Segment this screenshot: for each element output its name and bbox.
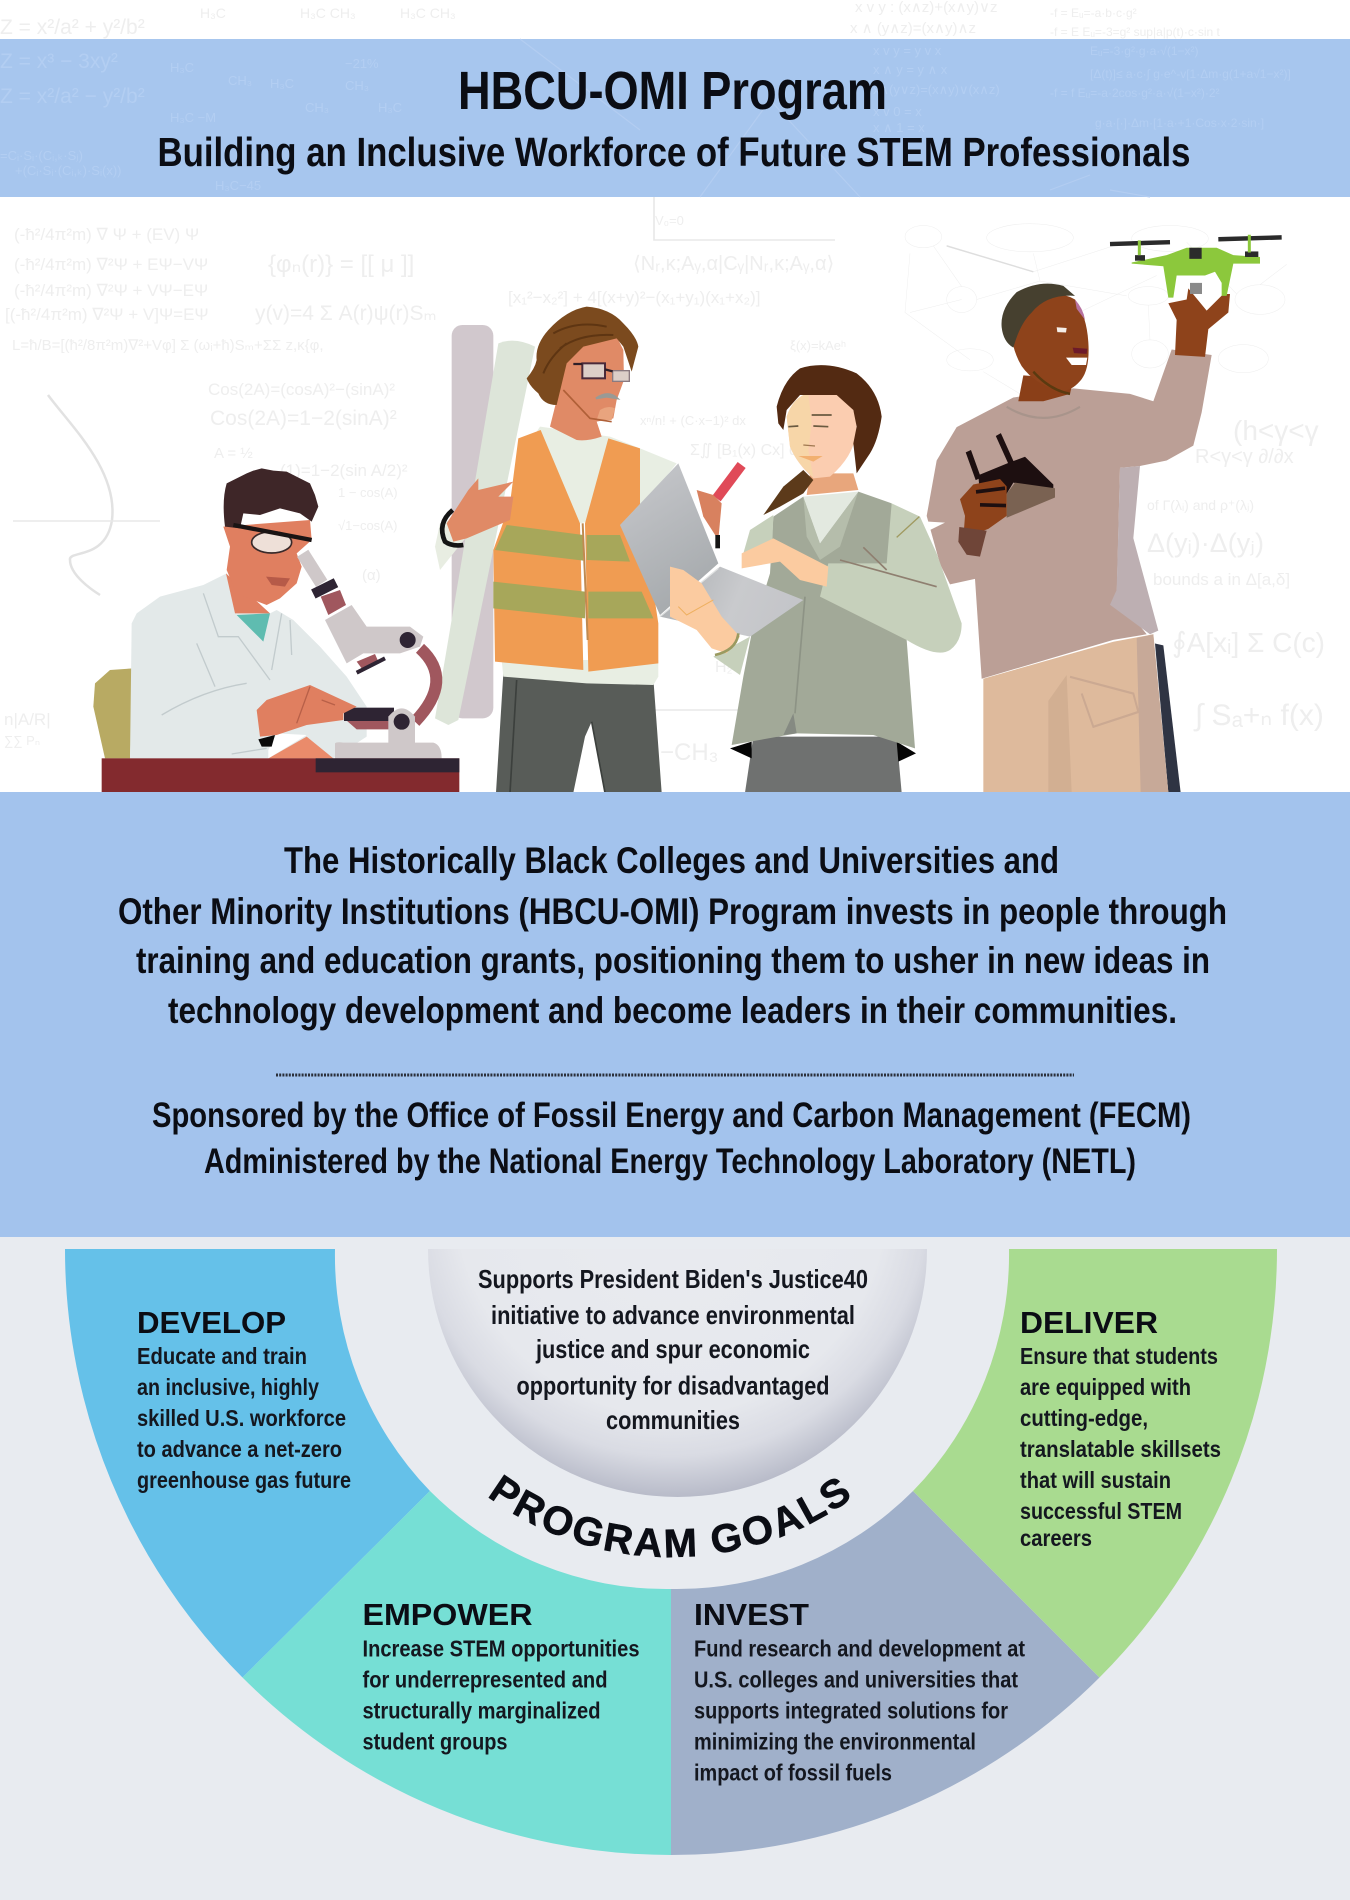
formula background: {φₙ(r)} = [[ μ ]] [268, 251, 414, 278]
invest text: U.S. colleges and universities that [694, 1666, 1018, 1692]
develop text: skilled U.S. workforce [137, 1405, 346, 1431]
formula background: V₀=0 [655, 213, 684, 228]
banner formula texture: CH₃ [345, 78, 369, 93]
formula background: y(v)=4 Σ A(r)ψ(r)Sₘ [255, 302, 437, 325]
formula background: ξ(x)=kAeʰ [790, 338, 846, 353]
formula background: x ∧ (y∧z)=(x∧y)∧z [850, 20, 976, 37]
formula background: Cos(2A)=1−2(sinA)² [210, 407, 397, 430]
formula background: H₃C [200, 5, 226, 21]
hand and knee [268, 737, 333, 758]
formula background: ⟨Nᵣ,κ;Aᵧ,α|Cᵧ|Nᵣ,κ;Aᵧ,α⟩ [633, 253, 834, 275]
network diagram sketch [905, 224, 1287, 394]
formula background: ∫ Sₐ+ₙ f(x) [1193, 699, 1324, 732]
description text [118, 840, 1227, 1031]
central justice40 callout [428, 1249, 927, 1497]
deliver text: cutting-edge, [1020, 1405, 1148, 1431]
invest text: minimizing the environmental [694, 1728, 976, 1754]
formula background: Δ(yᵢ)·Δ(yⱼ) [1147, 528, 1264, 558]
description text: The Historically Black Colleges and Universities and [284, 840, 1059, 881]
banner formula texture: x ∧ 1 = x [873, 120, 925, 135]
illustration: engineer in safety vest [435, 307, 742, 793]
develop text: to advance a net-zero [137, 1436, 342, 1462]
central justice40 callout: opportunity for disadvantaged [516, 1370, 830, 1400]
formula background: Z = x²/a² + y²/b² [0, 16, 145, 39]
banner formula texture: x∧(y∨z)=(x∧y)∨(x∧z) [873, 82, 1000, 97]
subtitle: Building an Inclusive Workforce of Future STEM Professionals [158, 129, 1190, 175]
description text: technology development and become leaders in their communities. [168, 990, 1177, 1031]
banner formula texture: g·a·[·]·Δm·[1·a·+1·Cos·x·2·sin·] [1095, 116, 1264, 130]
formula background: √1−cos(A) [338, 518, 398, 533]
deliver text: that will sustain [1020, 1467, 1171, 1493]
formula background: −CH₃ [660, 739, 718, 766]
formula background: A = ½ [214, 445, 253, 462]
formula background: H₃C CH₃ [400, 5, 456, 21]
formula background [0, 0, 1325, 766]
formula background: xⁿ/n! + (C·x−1)² dx [640, 413, 746, 428]
empower text: for underrepresented and [362, 1666, 608, 1692]
header banner [0, 39, 1350, 197]
banner formula texture [0, 39, 1291, 197]
banner formula texture: x ∧ y = y ∧ x [873, 62, 948, 77]
title: HBCU-OMI Program [458, 61, 887, 121]
formula background: -f = Eᵤ=-a·b·c·g² [1050, 6, 1137, 20]
empower text: structurally marginalized [362, 1698, 600, 1724]
tablet [620, 463, 803, 637]
illustration: woman with tablet [620, 365, 962, 793]
sponsor text: Administered by the National Energy Technology Laboratory (NETL) [204, 1142, 1136, 1181]
deliver heading: DELIVER [1020, 1305, 1158, 1340]
banner formula texture: H₃C [270, 76, 294, 91]
develop text: greenhouse gas future [137, 1467, 351, 1493]
develop text: Educate and train [137, 1343, 307, 1369]
empower text [362, 1636, 640, 1754]
formula background: Cos(2A)=(cosA)²−(sinA)² [208, 380, 395, 399]
formula background: -f = E Eᵤ=-3=g² sup|a|p(t)·c·sin t [1050, 25, 1221, 39]
controller [958, 435, 1055, 557]
formula background: [x₁²−x₂²] + 4[(x+y)²−(x₁+y₁)(x₁+x₂)] [508, 288, 760, 307]
banner formula texture: +(Cᵢ·Sᵢ·(Cᵢ,ₖ)·Sᵢ(x)) [15, 163, 122, 178]
banner formula texture: CH₃ [228, 73, 252, 88]
formula background: of Γ(λᵢ) and ρ⁺(λⱼ) [1147, 497, 1254, 513]
red pen and hand [717, 465, 742, 498]
formula background: (α) [362, 567, 381, 584]
illustration: lab scientist at microscope [93, 468, 459, 792]
panel: program description [0, 792, 1350, 1237]
deliver text: translatable skillsets [1020, 1436, 1221, 1462]
banner formula texture: =Cᵢ·Sᵢ·(Cᵢ,ₖ·Sⱼ) [0, 148, 83, 163]
chair [93, 668, 133, 758]
formula background: ∮A[xᵢ] Σ C(c) [1172, 627, 1325, 658]
formula background: H₂ [715, 659, 733, 676]
formula background: (-ħ²/4π²m) ∇ Ψ + (EV) Ψ [14, 225, 199, 244]
banner formula texture: H₃C [170, 60, 194, 75]
banner formula texture: H₃C −M [170, 110, 216, 125]
banner formula texture: Z = x²/a² − y²/b² [0, 85, 145, 108]
formula background: 1 − cos(A) [338, 485, 398, 500]
invest heading: INVEST [694, 1597, 809, 1632]
banner formula texture: H₃C [378, 100, 402, 115]
formula background: (-ħ²/4π²m) ∇²Ψ + VΨ−EΨ [14, 281, 208, 300]
empower heading: EMPOWER [362, 1597, 532, 1632]
formula background: (h<γ<γ [1233, 415, 1319, 446]
empower text: Increase STEM opportunities [362, 1636, 640, 1662]
deliver text: successful STEM [1020, 1498, 1182, 1524]
sine curve sketch [48, 395, 113, 595]
formula background: bounds a in Δ[a,δ] [1153, 570, 1290, 589]
invest text: supports integrated solutions for [694, 1698, 1008, 1724]
develop text: an inclusive, highly [137, 1374, 319, 1400]
central justice40 callout: communities [606, 1405, 740, 1435]
develop text [137, 1343, 351, 1493]
develop heading: DEVELOP [137, 1305, 286, 1340]
central justice40 callout: initiative to advance environmental [491, 1300, 855, 1330]
banner formula texture: Eᵤ=-3·g²·g·a·√(1−x²) [1090, 44, 1199, 58]
formula background: ∑∑ Pₙ [4, 733, 40, 748]
central justice40 callout: Supports President Biden's Justice40 [478, 1264, 868, 1294]
illustration: drone operator [927, 235, 1282, 793]
banner formula texture: Z = x³ − 3xy² [0, 50, 118, 73]
invest text: impact of fossil fuels [694, 1760, 892, 1786]
segment: empower [242, 1491, 671, 1855]
hands [742, 538, 828, 587]
formula background: (-ħ²/4π²m) ∇²Ψ + EΨ−VΨ [14, 255, 208, 274]
deliver text: are equipped with [1020, 1374, 1191, 1400]
segment: develop [65, 1249, 430, 1678]
invest text: Fund research and development at [694, 1636, 1025, 1662]
banner formula texture: -f = f Eᵤ=-a·2cos·g²·a·√(1−x²)·2² [1050, 86, 1220, 100]
formula background: n|A/R| [4, 710, 51, 729]
formula background: b [880, 712, 888, 728]
formula background: Σ∬ [B₁(x) Cx] dx dy [690, 442, 827, 459]
drone [1110, 235, 1282, 298]
hand left [447, 478, 513, 542]
segment: deliver [913, 1249, 1277, 1678]
deliver text: careers [1020, 1525, 1092, 1551]
banner formula texture: [Δ(t)]≤ a·c·∫ g·e^-v[1·Δm·g(1+a√1−x²)] [1090, 67, 1291, 81]
formula background: [(-ħ²/4π²m) ∇²Ψ + V]Ψ=EΨ [5, 305, 209, 324]
deliver text [1020, 1343, 1221, 1551]
invest text [694, 1636, 1025, 1786]
banner formula texture: x v y = y v x [873, 43, 942, 58]
microscope [303, 553, 442, 758]
lab coat [130, 573, 367, 758]
segment: invest [671, 1491, 1100, 1855]
deliver text: Ensure that students [1020, 1343, 1218, 1369]
desk [102, 758, 459, 792]
banner formula texture: CH₃ [305, 100, 329, 115]
empower text: student groups [362, 1728, 508, 1754]
formula background: (1)=1−2(sin A/2)² [280, 461, 408, 480]
formula background: R<γ<γ ∂/∂x [1195, 446, 1294, 468]
banner formula texture: −21% [345, 56, 379, 71]
central justice40 callout: justice and spur economic [535, 1334, 810, 1364]
raised hand [1168, 288, 1230, 357]
curved heading: program goals: PROGRAM GOALS [488, 1474, 850, 1558]
formula background: H₃C CH₃ [300, 5, 356, 21]
formula background: L=ħ/B=[(ħ²/8π²m)∇²+Vφ] Σ (ωᵢ+ħ)Sₘ+ΣΣ z,κ{φ, [12, 337, 324, 354]
banner formula texture: x v 0 = x [873, 104, 922, 119]
sponsor text [152, 1096, 1191, 1181]
banner formula texture: H₃C−45 [215, 178, 261, 193]
panel: program goals background [0, 1237, 1350, 1900]
